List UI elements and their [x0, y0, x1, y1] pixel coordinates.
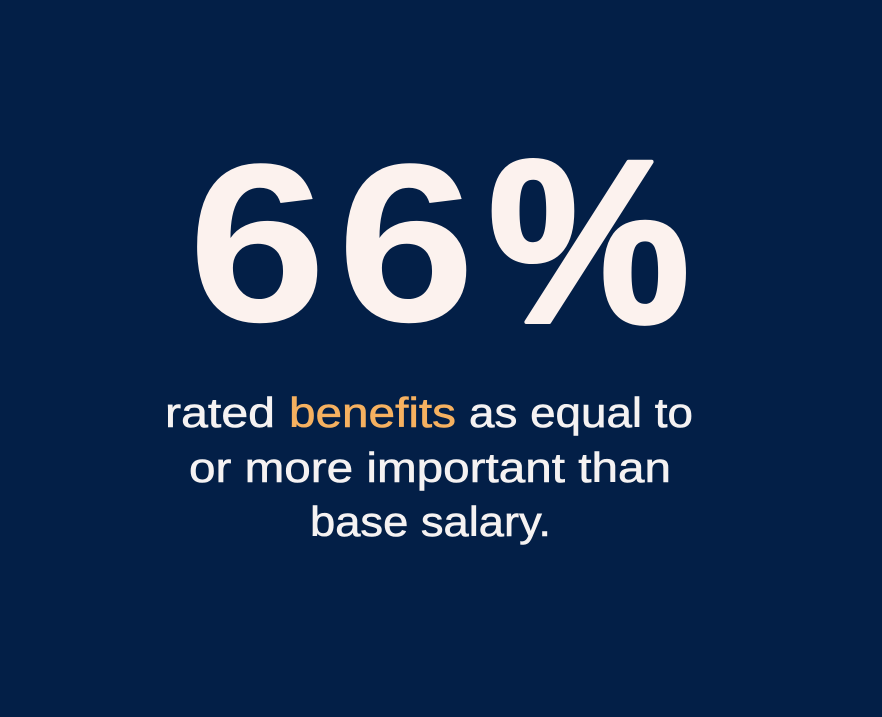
caption line 1: as equal to — [469, 389, 693, 436]
caption line 3: base salary. — [310, 498, 551, 545]
caption line 1 — [165, 389, 693, 436]
headline statistic: 66% — [188, 111, 690, 372]
headline statistic: 66%: % — [488, 111, 690, 372]
caption line 2: or more important than — [189, 444, 671, 491]
headline statistic: 66%: 6 — [188, 117, 326, 370]
caption line 1: rated — [165, 389, 275, 436]
highlighted word: benefits: benefits — [289, 389, 456, 436]
caption text — [165, 389, 693, 545]
headline statistic: 66%: 6 — [337, 117, 475, 370]
